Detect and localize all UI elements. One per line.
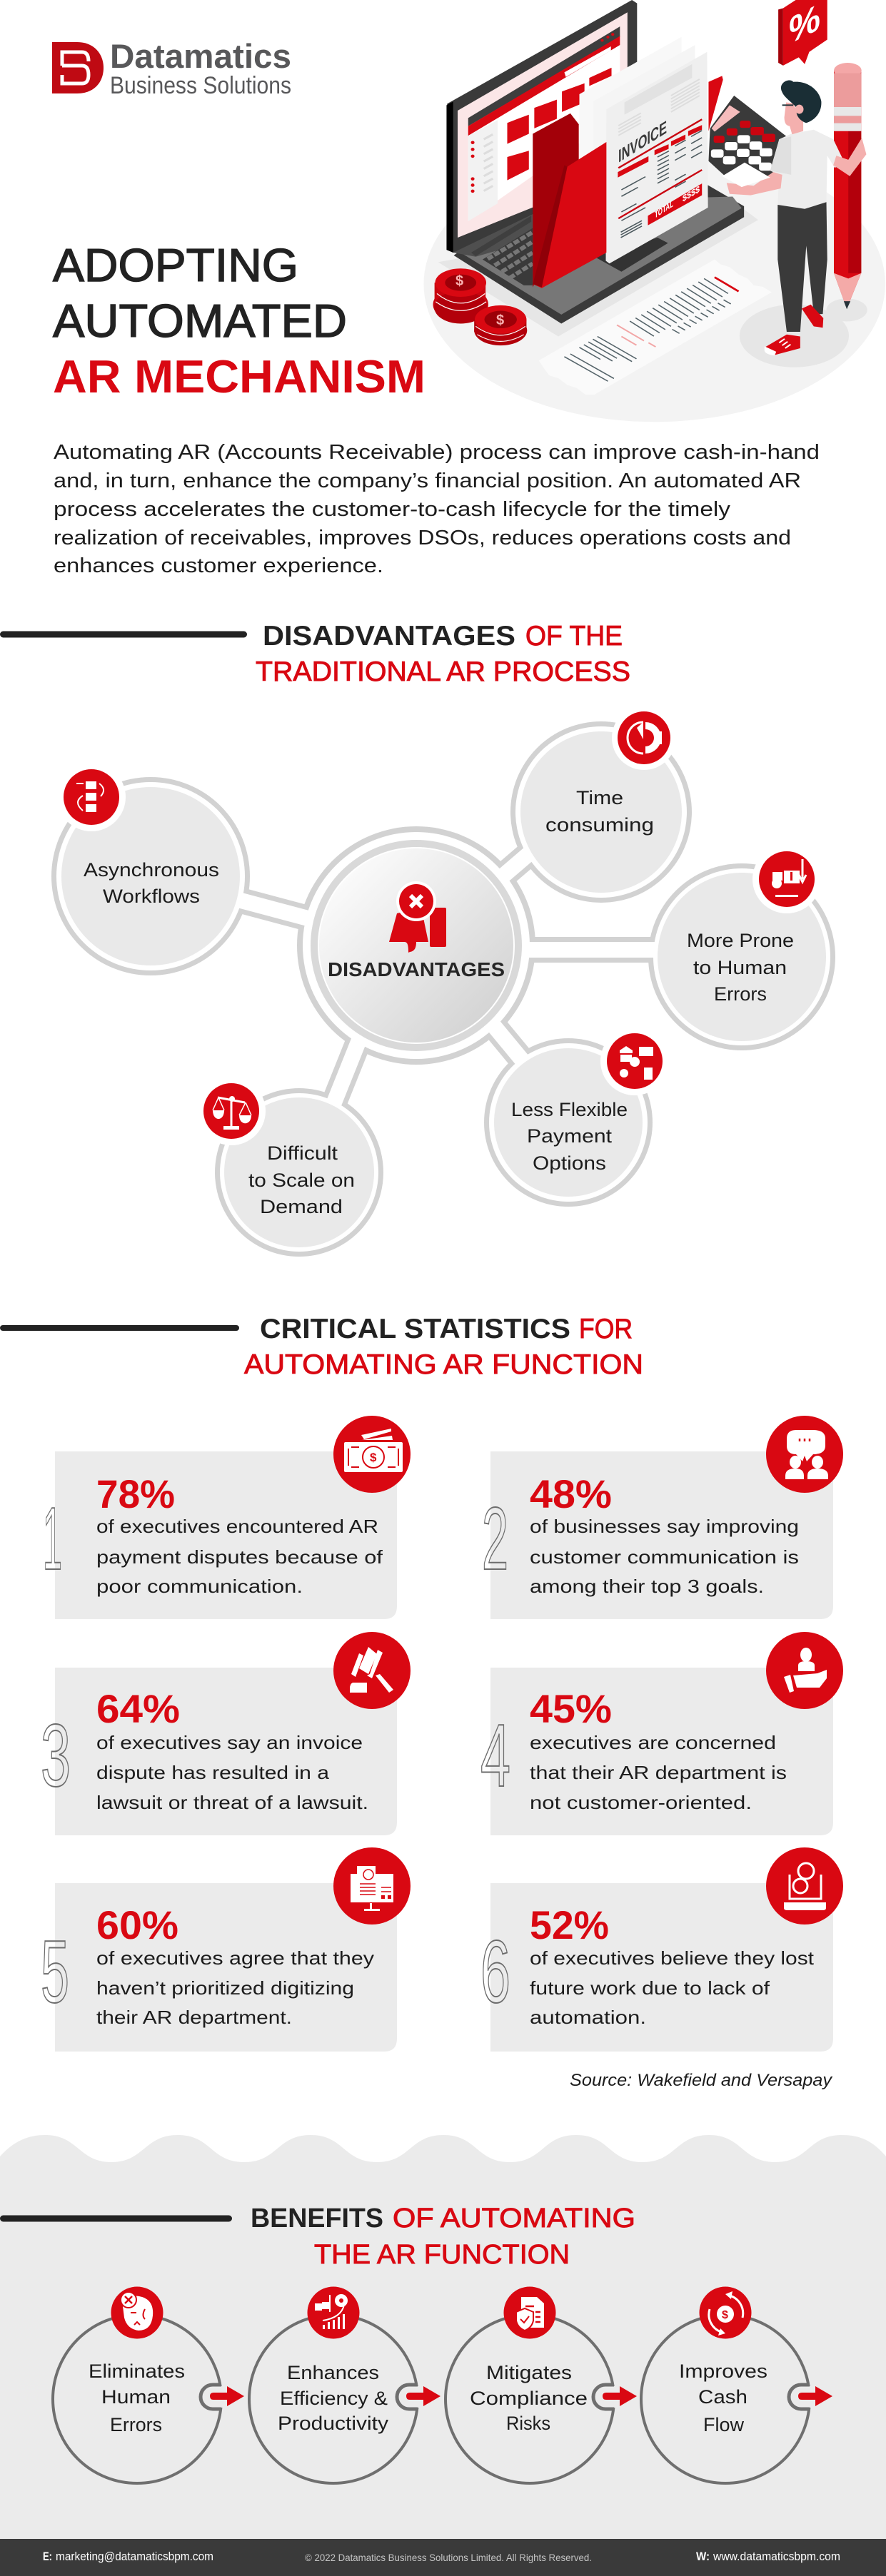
footer: W: (696, 2550, 710, 2563)
item: more prone to human errors (687, 845, 821, 1005)
card 4: executives are concerned (530, 1732, 776, 1753)
panel: benefits background (0, 2135, 886, 2540)
item: less flexible payment options: Payment (527, 1125, 613, 1147)
card 6: 6 (480, 1923, 510, 2022)
logo wordmark: Business Solutions (110, 72, 291, 99)
card 4: 4 (480, 1707, 510, 1805)
back sheets (708, 76, 723, 131)
footer: marketing@datamaticsbpm.com (56, 2550, 213, 2563)
footer: www.datamaticsbpm.com (713, 2550, 840, 2563)
logo wordmark (110, 37, 291, 99)
logo wordmark: Datamatics (110, 37, 291, 75)
intro paragraph: process accelerates the customer-to-cash lifecycle for the timely (54, 498, 731, 521)
card 3: of executives say an invoice (96, 1732, 363, 1753)
benefit 1: Human (101, 2386, 171, 2408)
folder front (533, 142, 606, 288)
footer: E: (43, 2550, 52, 2563)
card 4: 45% (530, 1686, 612, 1731)
title: AUTOMATED (53, 295, 347, 347)
benefit 2: Productivity (278, 2413, 389, 2434)
item: less flexible payment options: Options (533, 1152, 606, 1174)
heading: critical statistics: FOR (579, 1314, 633, 1344)
benefit 3: Mitigates (486, 2362, 572, 2383)
title: AR MECHANISM (53, 350, 426, 402)
card 2: of businesses say improving (530, 1516, 799, 1537)
card 1: 78% (96, 1471, 175, 1516)
benefit 3: Compliance (470, 2388, 588, 2409)
item: more prone to human errors: More Prone (687, 930, 794, 951)
card 2: 2 (482, 1490, 508, 1588)
heading: benefits: BENEFITS (251, 2204, 383, 2233)
connected rings (51, 721, 835, 1257)
heading: critical statistics (0, 1314, 643, 1380)
panel: statistics cards (41, 1416, 843, 2052)
intro paragraph (54, 441, 820, 577)
card 5 (41, 1847, 411, 2052)
item: asynchronous workflows: Asynchronous (84, 859, 219, 881)
heading: critical statistics: CRITICAL STATISTICS (260, 1314, 570, 1344)
calculator (708, 96, 787, 179)
card 1 (43, 1416, 411, 1619)
item: less flexible payment options (511, 1027, 669, 1174)
footer (0, 2539, 886, 2576)
folder back (533, 113, 579, 288)
footer: © 2022 Datamatics Business Solutions Limited. All Rights Reserved. (305, 2552, 592, 2563)
heading: benefits (0, 2204, 635, 2270)
card 6: of executives believe they lost (530, 1947, 815, 1969)
item: less flexible payment options: Less Flexible (511, 1099, 628, 1120)
item: time consuming (545, 706, 676, 836)
item: difficult to scale on demand: Demand (260, 1196, 343, 1217)
card 2: among their top 3 goals. (530, 1576, 764, 1597)
item: time consuming: consuming (545, 814, 654, 836)
coin dollar: $ (496, 313, 504, 328)
total label: TOTAL (655, 198, 673, 221)
item: difficult to scale on demand: Difficult (267, 1142, 338, 1164)
source note: Source: Wakefield and Versapay (570, 2071, 833, 2090)
benefit 1 (53, 2286, 244, 2483)
percent bubble (783, 0, 827, 66)
title: ADOPTING (53, 239, 298, 291)
card 6: automation. (530, 2007, 646, 2028)
benefit 3: Risks (506, 2413, 550, 2434)
card 2 (482, 1416, 843, 1619)
item: difficult to scale on demand (197, 1077, 355, 1217)
card 3: dispute has resulted in a (96, 1762, 330, 1783)
benefit 1: Errors (110, 2414, 162, 2435)
card 2: customer communication is (530, 1546, 799, 1568)
heading: benefits: OF AUTOMATING (393, 2204, 635, 2233)
logo (52, 37, 291, 99)
heading: benefits: THE AR FUNCTION (314, 2240, 570, 2270)
person and pencil (740, 305, 849, 367)
invoice label: INVOICE (618, 116, 667, 166)
card 1: 1 (43, 1490, 62, 1588)
logo mark (52, 42, 104, 93)
intro paragraph: enhances customer experience. (54, 554, 383, 577)
panel: disadvantages diagram (51, 706, 835, 1257)
heading: disadvantages: DISADVANTAGES (263, 621, 515, 651)
card 1: of executives encountered AR (96, 1516, 378, 1537)
hero illustration (423, 0, 885, 422)
benefit 4: $ (722, 2309, 728, 2321)
invoice sheet (606, 52, 708, 263)
receipt (539, 260, 772, 395)
amount label: $$$$ (683, 183, 700, 204)
benefit 4: Flow (703, 2414, 744, 2435)
card 6 (480, 1847, 843, 2052)
intro paragraph: Automating AR (Accounts Receivable) process can improve cash-in-hand (54, 441, 820, 464)
benefit 2 (249, 2286, 441, 2483)
heading: disadvantages: OF THE (525, 621, 623, 651)
card 5: 5 (41, 1923, 69, 2022)
benefit 2: Enhances (287, 2362, 379, 2383)
item: time consuming: Time (576, 787, 623, 808)
benefit 1: Eliminates (89, 2361, 185, 2382)
card 1: poor communication. (96, 1576, 303, 1597)
card 3: 64% (96, 1686, 180, 1731)
card 2: 48% (530, 1471, 612, 1516)
card 3 (41, 1632, 411, 1835)
benefit 4: Improves (679, 2361, 767, 2382)
shadow stand (595, 238, 668, 272)
card 4: that their AR department is (530, 1762, 787, 1783)
intro paragraph: and, in turn, enhance the company’s financial position. An automated AR (54, 470, 801, 492)
heading: disadvantages (0, 621, 630, 687)
card 4 (480, 1632, 843, 1835)
card 5: their AR department. (96, 2007, 292, 2028)
heading: disadvantages: TRADITIONAL AR PROCESS (256, 656, 630, 687)
card 6: 52% (530, 1902, 609, 1947)
card 3: 3 (41, 1707, 71, 1805)
item: more prone to human errors: to Human (693, 957, 787, 978)
benefit 2: Efficiency & (280, 2388, 388, 2409)
benefit 4 (641, 2286, 832, 2483)
card 5: 60% (96, 1902, 178, 1947)
card 5: of executives agree that they (96, 1947, 374, 1969)
item: asynchronous workflows: Workflows (103, 886, 200, 907)
card 1: payment disputes because of (96, 1546, 383, 1568)
benefit 4: Cash (698, 2386, 747, 2408)
intro paragraph: realization of receivables, improves DSOs, reduces operations costs and (54, 527, 791, 549)
item: asynchronous workflows (57, 763, 219, 907)
heading: critical statistics: AUTOMATING AR FUNCTION (244, 1349, 643, 1380)
card 5: haven’t prioritized digitizing (96, 1977, 354, 1999)
center label: DISADVANTAGES (328, 958, 505, 980)
panel: benefits flow (53, 2286, 832, 2483)
item: difficult to scale on demand: to Scale on (248, 1170, 355, 1191)
item: more prone to human errors: Errors (714, 983, 767, 1005)
card 3: lawsuit or threat of a lawsuit. (96, 1792, 368, 1813)
coins (433, 287, 488, 323)
coin dollar: $ (455, 273, 463, 289)
card 1: $ (370, 1451, 377, 1464)
card 4: not customer-oriented. (530, 1792, 752, 1813)
card 6: future work due to lack of (530, 1977, 770, 1999)
title (53, 239, 426, 402)
benefit 3 (445, 2286, 637, 2483)
keyboard (483, 228, 533, 285)
icon: thumbs down (389, 881, 446, 953)
